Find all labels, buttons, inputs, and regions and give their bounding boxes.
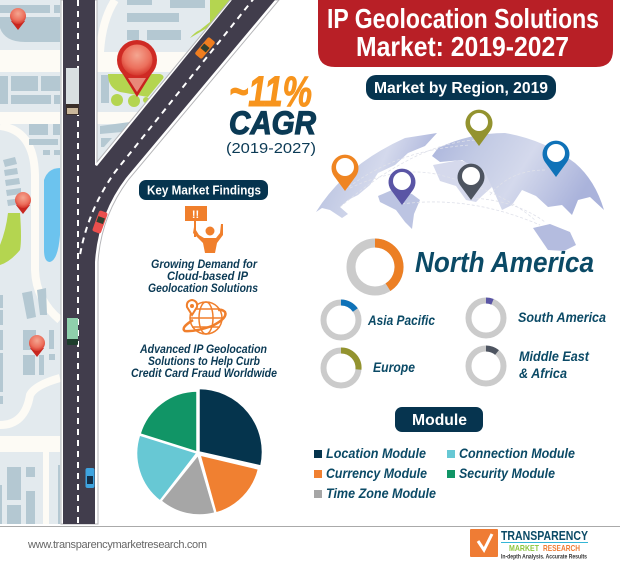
logo: Transparency Market Research: RESEARCH (543, 543, 580, 553)
label: Middle East and Africa: Middle East (519, 348, 590, 364)
legend: module types: Time Zone Module (326, 486, 436, 501)
CAGR callout: CAGR (229, 105, 316, 141)
legend: module types: Security Module (459, 466, 555, 481)
donut: Europe (324, 350, 359, 386)
CAGR callout (226, 68, 316, 157)
logo: Transparency Market Research: MARKET (509, 543, 540, 553)
label: Middle East and Africa (519, 348, 590, 381)
text: growing demand finding: Cloud-based IP (167, 269, 249, 283)
title banner: Market: 2019-2027 (356, 31, 569, 62)
legend: module types: Connection Module (459, 446, 575, 461)
label: Europe: Europe (373, 359, 415, 375)
label: South America: South America (518, 309, 606, 325)
title banner (318, 0, 613, 67)
logo: Transparency Market Research (470, 528, 588, 560)
CAGR callout: (2019-2027) (226, 140, 316, 157)
donut: North America (351, 243, 399, 291)
heading: Module (395, 407, 483, 432)
CAGR callout: ~11% (229, 68, 312, 116)
text: advanced geolocation finding (131, 342, 277, 380)
pie chart: module share (137, 388, 262, 515)
donut: Middle East and Africa (468, 348, 504, 384)
vehicle: blue car (86, 468, 94, 488)
donut: South America (468, 300, 504, 336)
heading: Key Market Findings: Key Market Findings (147, 182, 261, 198)
text: growing demand finding: Geolocation Solutions (148, 281, 258, 295)
footer url: www.transparencymarketresearch.com (27, 539, 207, 551)
text: advanced geolocation finding: Credit Card Fraud Worldwide (131, 366, 277, 380)
icon: globe with pin (184, 300, 225, 334)
vehicle: orange car (194, 37, 216, 59)
text: growing demand finding (148, 257, 258, 295)
roads (61, 0, 279, 524)
icon: blue location pin (542, 141, 570, 177)
legend: module types: Location Module (326, 446, 426, 461)
donut: Asia Pacific (324, 302, 358, 338)
icon: small red pin lower left (29, 335, 45, 357)
icon: orange location pin (332, 155, 358, 191)
text: advanced geolocation finding: Advanced IP Geolocation (139, 342, 267, 356)
icon: person with sign (185, 206, 223, 253)
heading: Market by Region (366, 75, 556, 100)
heading: Key Market Findings (139, 180, 268, 200)
icon: dark grey location pin (457, 164, 484, 200)
icon: small red pin top left (10, 8, 26, 30)
icon: purple location pin (388, 169, 416, 205)
logo: Transparency Market Research: TRANSPARENCY (501, 528, 588, 543)
text: growing demand finding: Growing Demand for (151, 257, 258, 271)
label: Asia Pacific: Asia Pacific (367, 312, 435, 328)
text: advanced geolocation finding: Solutions to Help Curb (148, 354, 260, 368)
logo: Transparency Market Research: In-depth Analysis. Accurate Results (501, 554, 587, 560)
heading: Market by Region: Market by Region, 2019 (374, 80, 548, 97)
icon: olive location pin (466, 110, 493, 146)
map background (0, 0, 232, 524)
label: Middle East and Africa: & Africa (519, 365, 567, 381)
world map (316, 133, 604, 251)
legend: module types (314, 446, 575, 501)
icon: large red map pin (117, 40, 157, 97)
heading: Module: Module (412, 412, 467, 429)
icon: small red pin middle left (15, 192, 31, 214)
label: North America: North America (415, 247, 594, 279)
legend: module types: Currency Module (326, 466, 427, 481)
vehicle: red car (92, 210, 108, 234)
vehicle: grey truck (66, 68, 79, 115)
icon: person with sign: !! (192, 209, 199, 221)
vehicle: green truck (67, 318, 78, 345)
